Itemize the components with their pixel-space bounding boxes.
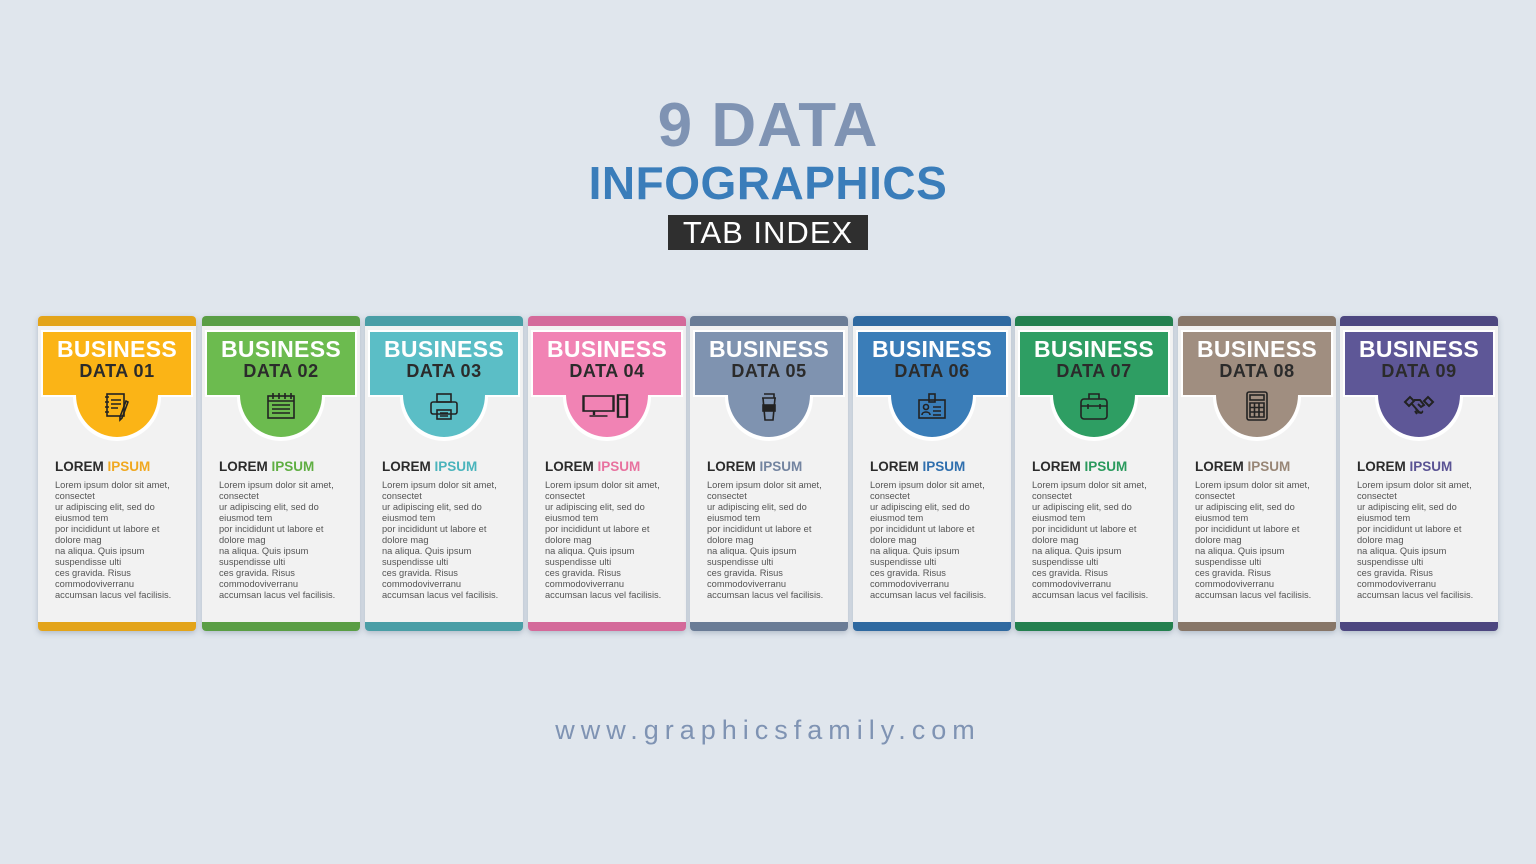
body text: ur adipiscing elit, sed do eiusmod tem [707,502,807,523]
body text: por incididunt ut labore et dolore mag [545,524,649,545]
body text: Lorem ipsum dolor sit amet, consectet [219,480,334,501]
body text [545,480,661,600]
body text: na aliqua. Quis ipsum suspendisse ulti [55,546,144,567]
body text: Lorem ipsum dolor sit amet, consectet [55,480,170,501]
card 06: DATA 06 [894,361,970,381]
body text: accumsan lacus vel facilisis. [55,590,171,600]
body text: Lorem ipsum dolor sit amet, consectet [707,480,822,501]
body text: na aliqua. Quis ipsum suspendisse ulti [545,546,634,567]
card 02: DATA 02 [243,361,319,381]
card 07: BUSINESS [1034,336,1154,362]
card 05: DATA 05 [731,361,807,381]
body text: Lorem ipsum dolor sit amet, consectet [545,480,660,501]
body text: ur adipiscing elit, sed do eiusmod tem [870,502,970,523]
body text: ur adipiscing elit, sed do eiusmod tem [1357,502,1457,523]
heading: LOREM IPSUM [1357,459,1452,474]
body text: accumsan lacus vel facilisis. [1032,590,1148,600]
body text: ur adipiscing elit, sed do eiusmod tem [1032,502,1132,523]
card 05: BUSINESS [709,336,829,362]
body text: ur adipiscing elit, sed do eiusmod tem [55,502,155,523]
title: INFOGRAPHICS: INFOGRAPHICS [589,157,947,209]
card 08: DATA 08 [1219,361,1295,381]
body text: accumsan lacus vel facilisis. [1195,590,1311,600]
body text: accumsan lacus vel facilisis. [545,590,661,600]
card 09: DATA 09 [1381,361,1457,381]
body text [382,480,498,600]
card 01: BUSINESS [57,336,177,362]
heading: LOREM IPSUM [545,459,640,474]
body text [870,480,986,600]
card 07: DATA 07 [1056,361,1132,381]
card 06: BUSINESS [872,336,992,362]
icon: calendar [267,393,295,419]
body text: accumsan lacus vel facilisis. [707,590,823,600]
body text: Lorem ipsum dolor sit amet, consectet [382,480,497,501]
card 07 [1015,316,1173,631]
body text: accumsan lacus vel facilisis. [219,590,335,600]
card 08 [1178,316,1336,631]
heading: LOREM IPSUM [707,459,802,474]
body text: Lorem ipsum dolor sit amet, consectet [870,480,985,501]
body text: ces gravida. Risus commodoviverranu [707,568,786,589]
body text: ces gravida. Risus commodoviverranu [1195,568,1274,589]
body text: por incididunt ut labore et dolore mag [1357,524,1461,545]
body text: na aliqua. Quis ipsum suspendisse ulti [382,546,471,567]
body text: Lorem ipsum dolor sit amet, consectet [1357,480,1472,501]
body text: na aliqua. Quis ipsum suspendisse ulti [219,546,308,567]
body text: ur adipiscing elit, sed do eiusmod tem [219,502,319,523]
icon: coffee cup [762,393,776,421]
title: 9 DATA: 9 DATA [658,91,878,160]
body text [219,480,335,600]
heading: LOREM IPSUM [219,459,314,474]
card 02 [202,316,360,631]
body text: na aliqua. Quis ipsum suspendisse ulti [707,546,796,567]
body text: por incididunt ut labore et dolore mag [1195,524,1299,545]
body text: por incididunt ut labore et dolore mag [219,524,323,545]
card 04: DATA 04 [569,361,645,381]
heading: LOREM IPSUM [55,459,150,474]
body text: por incididunt ut labore et dolore mag [55,524,159,545]
card 09: BUSINESS [1359,336,1479,362]
card 01 [38,316,196,631]
card 04 [528,316,686,631]
card 01: DATA 01 [79,361,155,381]
icon: handshake [1404,396,1434,414]
body text: por incididunt ut labore et dolore mag [382,524,486,545]
body text: ces gravida. Risus commodoviverranu [870,568,949,589]
body text: na aliqua. Quis ipsum suspendisse ulti [1032,546,1121,567]
icon: calculator [1246,391,1268,421]
footer url: www.graphicsfamily.com [555,715,981,745]
body text: ces gravida. Risus commodoviverranu [219,568,298,589]
body text: ces gravida. Risus commodoviverranu [1357,568,1436,589]
body text: ces gravida. Risus commodoviverranu [1032,568,1111,589]
body text: por incididunt ut labore et dolore mag [707,524,811,545]
body text: por incididunt ut labore et dolore mag [870,524,974,545]
body text: ur adipiscing elit, sed do eiusmod tem [545,502,645,523]
icon: printer [430,393,458,420]
body text [1195,480,1311,600]
card 08: BUSINESS [1197,336,1317,362]
heading: LOREM IPSUM [870,459,965,474]
subtitle: TAB INDEX: TAB INDEX [683,215,853,250]
card 05 [690,316,848,631]
body text: accumsan lacus vel facilisis. [1357,590,1473,600]
heading: LOREM IPSUM [1195,459,1290,474]
card 09 [1340,316,1498,631]
icon: briefcase [1080,393,1108,420]
card 06 [853,316,1011,631]
card 03: BUSINESS [384,336,504,362]
body text: ces gravida. Risus commodoviverranu [382,568,461,589]
heading: LOREM IPSUM [382,459,477,474]
body text: ces gravida. Risus commodoviverranu [545,568,624,589]
icon: id badge [918,393,946,419]
body text: ur adipiscing elit, sed do eiusmod tem [382,502,482,523]
heading: LOREM IPSUM [1032,459,1127,474]
body text [1357,480,1473,600]
body text: na aliqua. Quis ipsum suspendisse ulti [1357,546,1446,567]
card 02: BUSINESS [221,336,341,362]
body text: ur adipiscing elit, sed do eiusmod tem [1195,502,1295,523]
body text: na aliqua. Quis ipsum suspendisse ulti [870,546,959,567]
body text: ces gravida. Risus commodoviverranu [55,568,134,589]
card 03 [365,316,523,631]
card 04: BUSINESS [547,336,667,362]
body text: por incididunt ut labore et dolore mag [1032,524,1136,545]
body text: Lorem ipsum dolor sit amet, consectet [1195,480,1310,501]
body text [55,480,171,600]
card 03: DATA 03 [406,361,482,381]
body text [1032,480,1148,600]
icon: computer [582,394,628,418]
body text: na aliqua. Quis ipsum suspendisse ulti [1195,546,1284,567]
body text: Lorem ipsum dolor sit amet, consectet [1032,480,1147,501]
body text: accumsan lacus vel facilisis. [382,590,498,600]
body text [707,480,823,600]
body text: accumsan lacus vel facilisis. [870,590,986,600]
icon: notepad [105,393,129,422]
